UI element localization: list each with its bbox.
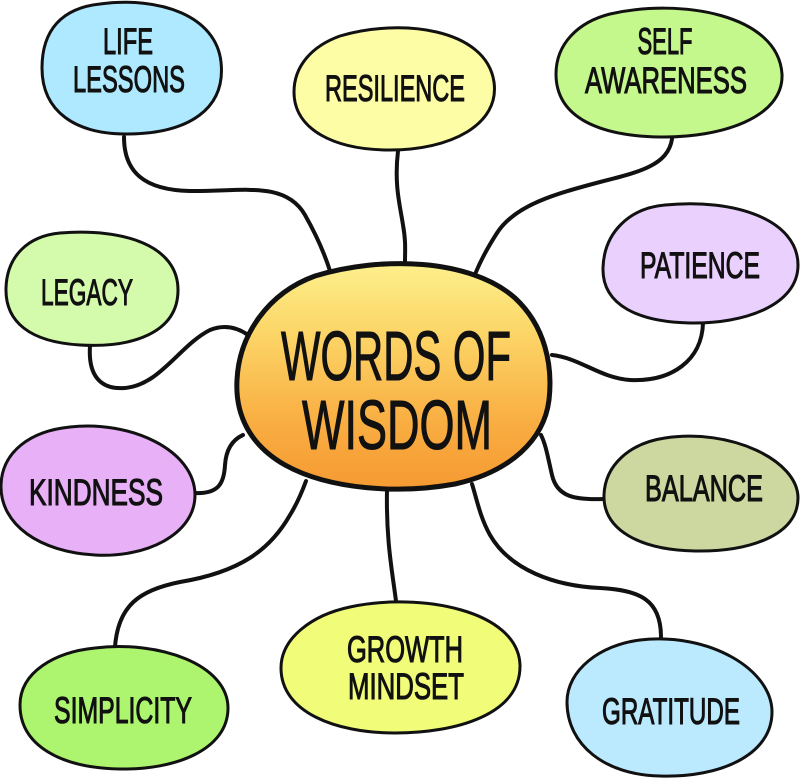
connector: self awareness <box>476 139 672 272</box>
connector: resilience <box>397 151 405 262</box>
node: growth mindset: MINDSET <box>348 666 464 707</box>
node: life lessons: LIFE <box>103 21 153 62</box>
connector: patience <box>552 323 703 380</box>
node: self awareness: SELF <box>638 21 692 62</box>
node: gratitude <box>567 639 772 776</box>
node: self awareness <box>556 8 782 137</box>
node: resilience: RESILIENCE <box>325 68 465 109</box>
node: life lessons <box>42 2 221 134</box>
node: kindness: KINDNESS <box>29 472 163 513</box>
node: patience <box>603 204 798 323</box>
node: legacy: LEGACY <box>41 272 133 313</box>
node: balance <box>604 436 798 551</box>
connector: balance <box>541 435 603 499</box>
connector: growth mindset <box>387 490 396 601</box>
connector: legacy <box>90 327 248 388</box>
node: life lessons: LESSONS <box>73 59 185 100</box>
node: growth mindset: GROWTH <box>347 629 463 670</box>
connector: life lessons <box>124 137 330 271</box>
connector: kindness <box>195 435 243 493</box>
connector: simplicity <box>115 481 306 647</box>
node: kindness <box>1 426 195 555</box>
connector: gratitude <box>472 484 661 637</box>
central node: words of wisdom <box>237 264 550 489</box>
node: growth mindset <box>281 602 520 733</box>
node: resilience <box>294 28 494 150</box>
node: simplicity: SIMPLICITY <box>54 690 192 731</box>
node: legacy <box>6 232 178 345</box>
central node: words of wisdom: WISDOM <box>302 386 492 464</box>
node: simplicity <box>20 647 228 769</box>
central node: words of wisdom: WORDS OF <box>281 317 511 395</box>
